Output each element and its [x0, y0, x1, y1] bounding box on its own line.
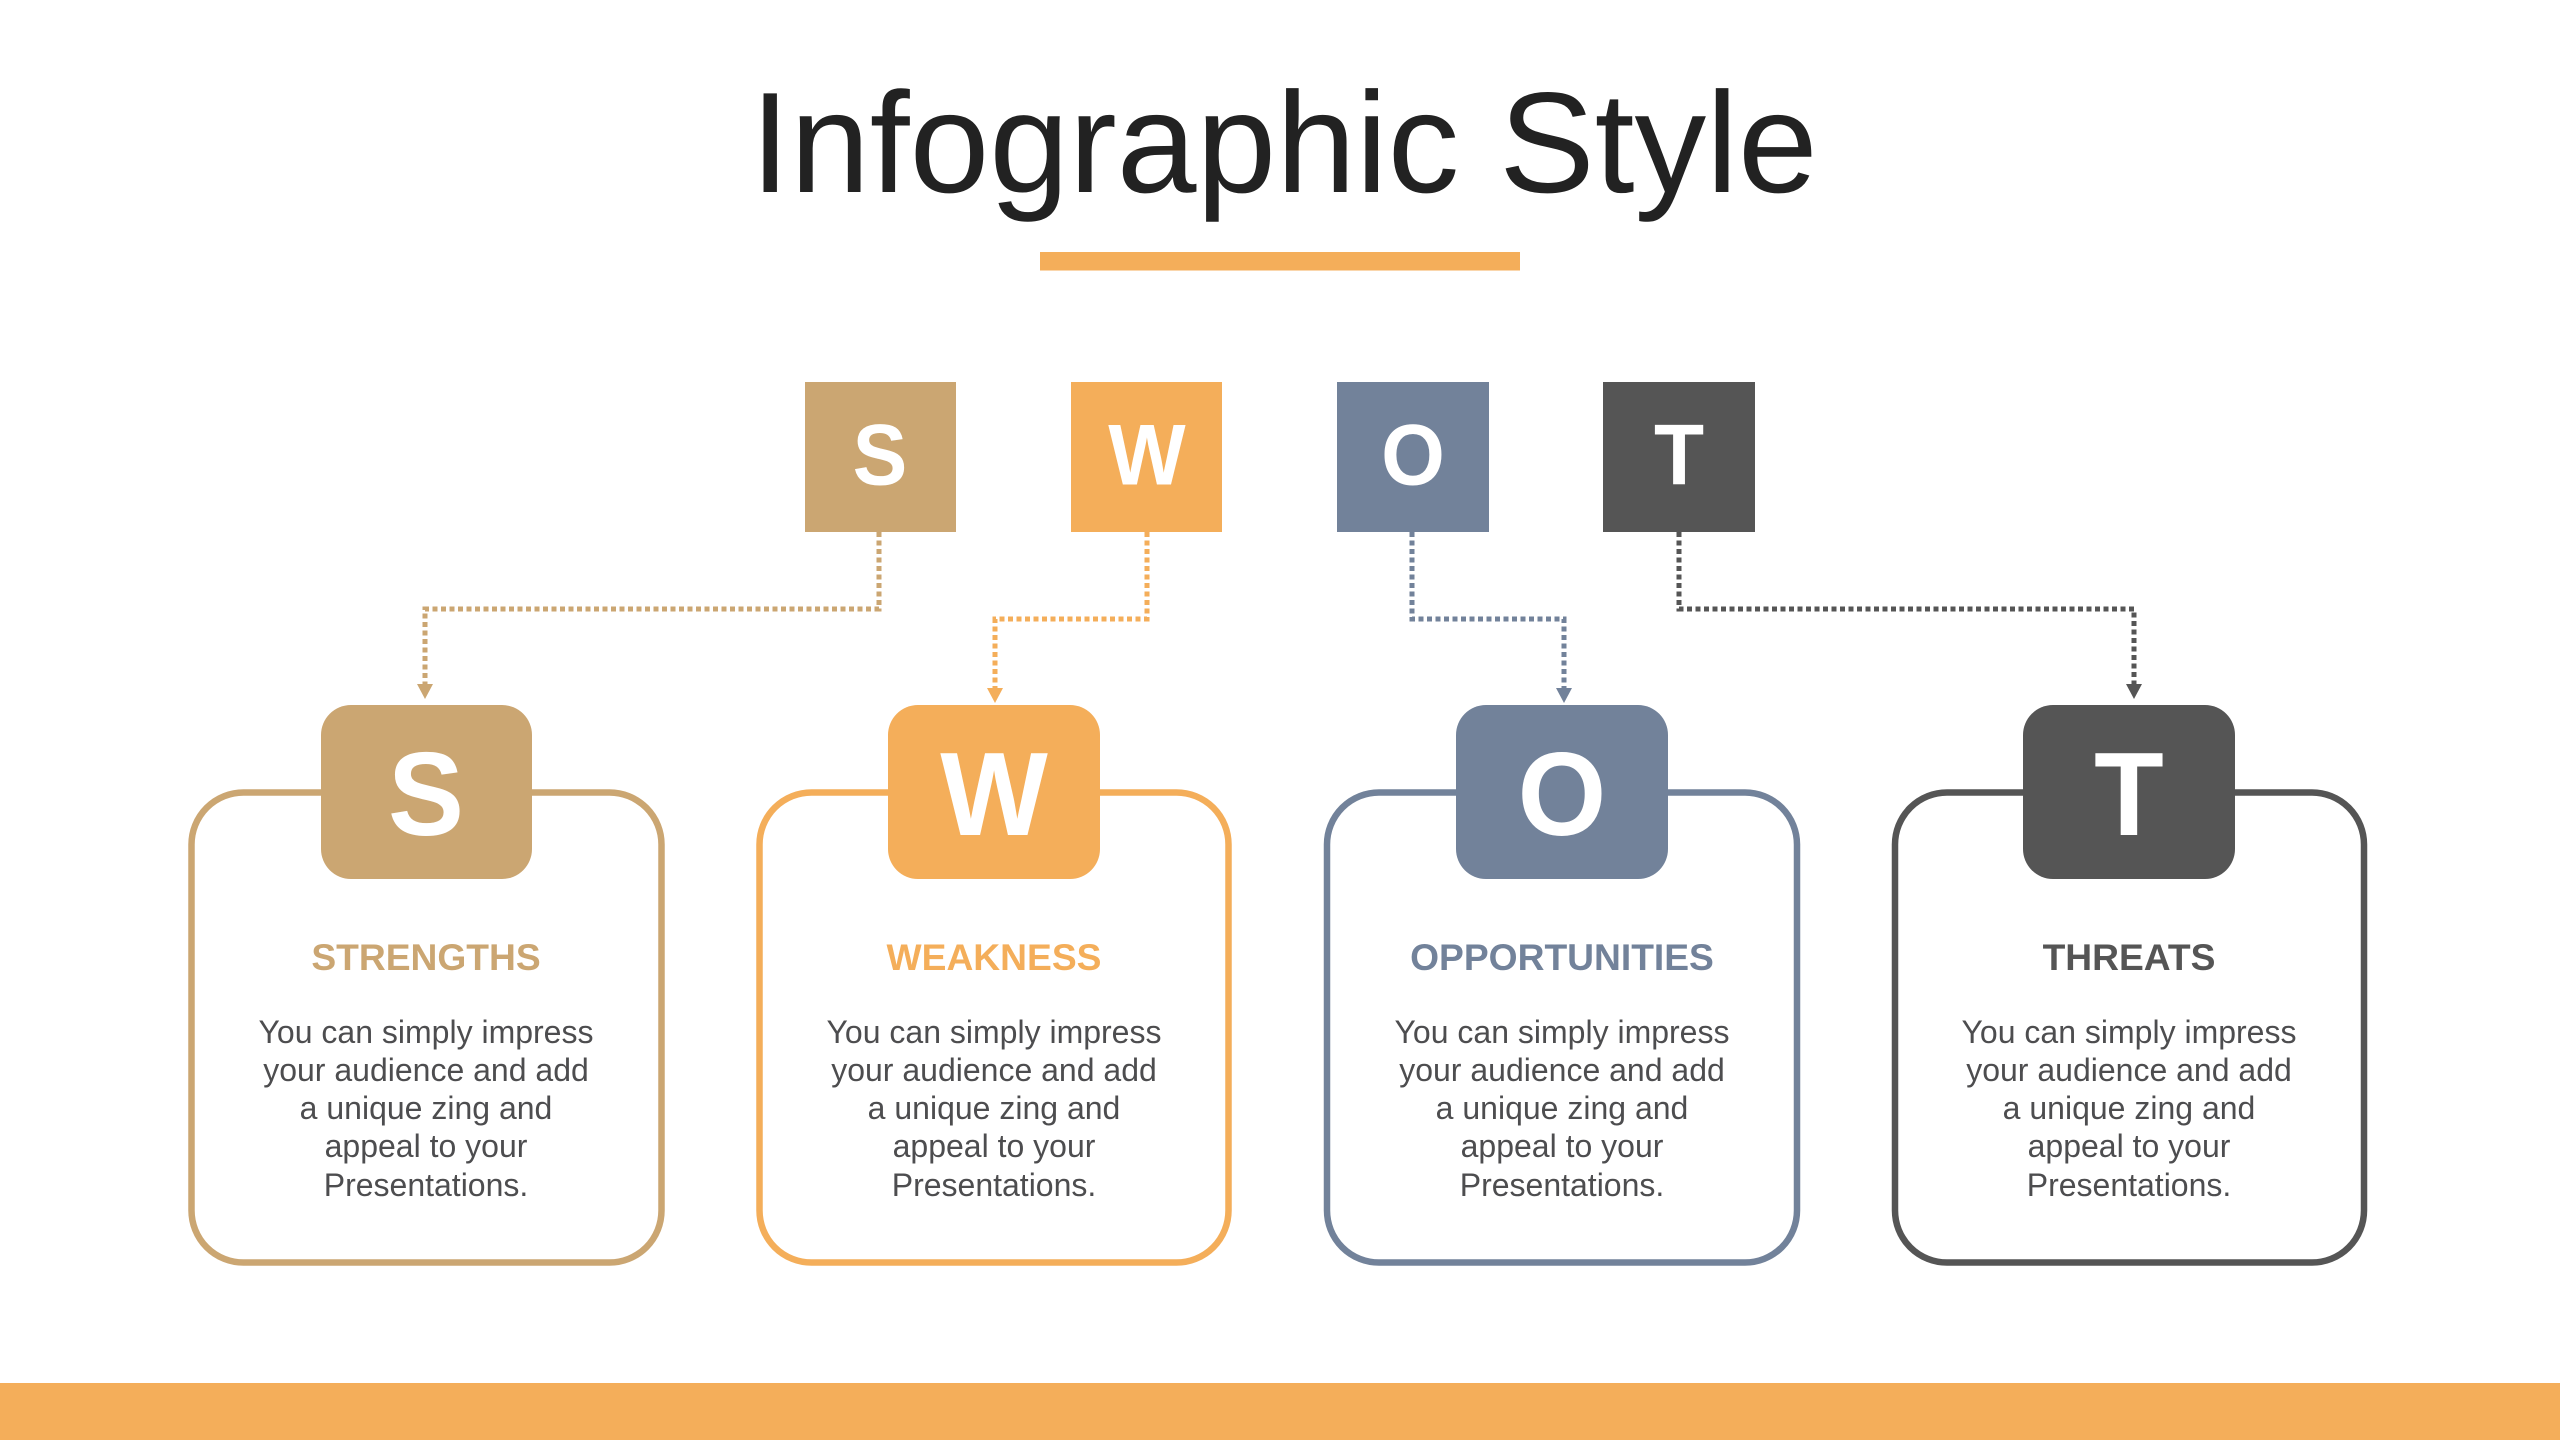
badge: O [1456, 705, 1668, 879]
badge: S: S [388, 728, 464, 860]
badge: W: W [940, 728, 1048, 860]
text: strengths body: a unique zing and [300, 1090, 552, 1126]
arrow: O square to Opportunities card [1412, 532, 1572, 703]
title underline [1040, 252, 1520, 270]
title: Infographic Style [750, 63, 1818, 223]
text: weakness body: You can simply impress [827, 1014, 1161, 1050]
square: W [1071, 382, 1222, 532]
square: O [1337, 382, 1489, 532]
square: O: O [1381, 407, 1445, 503]
arrow: W square to Weakness card [987, 532, 1147, 703]
heading: threats: THREATS [2043, 936, 2215, 978]
text: opportunities body: a unique zing and [1436, 1090, 1688, 1126]
text: weakness body: Presentations. [892, 1167, 1096, 1203]
square: T: T [1654, 407, 1704, 503]
panel: opportunities [1327, 705, 1797, 1262]
panel: weakness [760, 705, 1228, 1262]
square: S [805, 382, 956, 532]
text: opportunities body [1395, 1014, 1729, 1203]
badge: T [2023, 705, 2235, 879]
text: strengths body: Presentations. [324, 1167, 528, 1203]
SWOT letter squares [805, 382, 1755, 532]
square: W: W [1108, 407, 1186, 503]
text: weakness body [827, 1014, 1161, 1203]
badge: O: O [1518, 728, 1606, 860]
text: opportunities body: your audience and add [1399, 1052, 1725, 1088]
panel: threats [1895, 705, 2364, 1262]
text: weakness body: appeal to your [893, 1128, 1096, 1164]
panel: strengths [192, 705, 662, 1262]
badge: W [888, 705, 1100, 879]
text: threats body [1962, 1014, 2296, 1203]
text: strengths body: You can simply impress [259, 1014, 593, 1050]
text: strengths body: appeal to your [325, 1128, 528, 1164]
text: threats body: appeal to your [2028, 1128, 2231, 1164]
square: S: S [853, 407, 907, 503]
text: threats body: a unique zing and [2003, 1090, 2255, 1126]
heading: opportunities: OPPORTUNITIES [1410, 936, 1714, 978]
text: opportunities body: Presentations. [1460, 1167, 1664, 1203]
square: T [1603, 382, 1755, 532]
arrow: T square to Threats card [1679, 532, 2142, 699]
footer bar [0, 1383, 2560, 1440]
text: opportunities body: You can simply impress [1395, 1014, 1729, 1050]
text: opportunities body: appeal to your [1461, 1128, 1664, 1164]
arrow: S square to Strengths card [417, 532, 879, 699]
text: strengths body [259, 1014, 593, 1203]
text: threats body: your audience and add [1966, 1052, 2292, 1088]
heading: weakness: WEAKNESS [887, 936, 1101, 978]
heading: strengths: STRENGTHS [311, 936, 541, 978]
badge: T: T [2094, 728, 2164, 860]
text: strengths body: your audience and add [263, 1052, 589, 1088]
text: weakness body: your audience and add [831, 1052, 1157, 1088]
text: threats body: You can simply impress [1962, 1014, 2296, 1050]
text: weakness body: a unique zing and [868, 1090, 1120, 1126]
badge: S [321, 705, 532, 879]
text: threats body: Presentations. [2027, 1167, 2231, 1203]
